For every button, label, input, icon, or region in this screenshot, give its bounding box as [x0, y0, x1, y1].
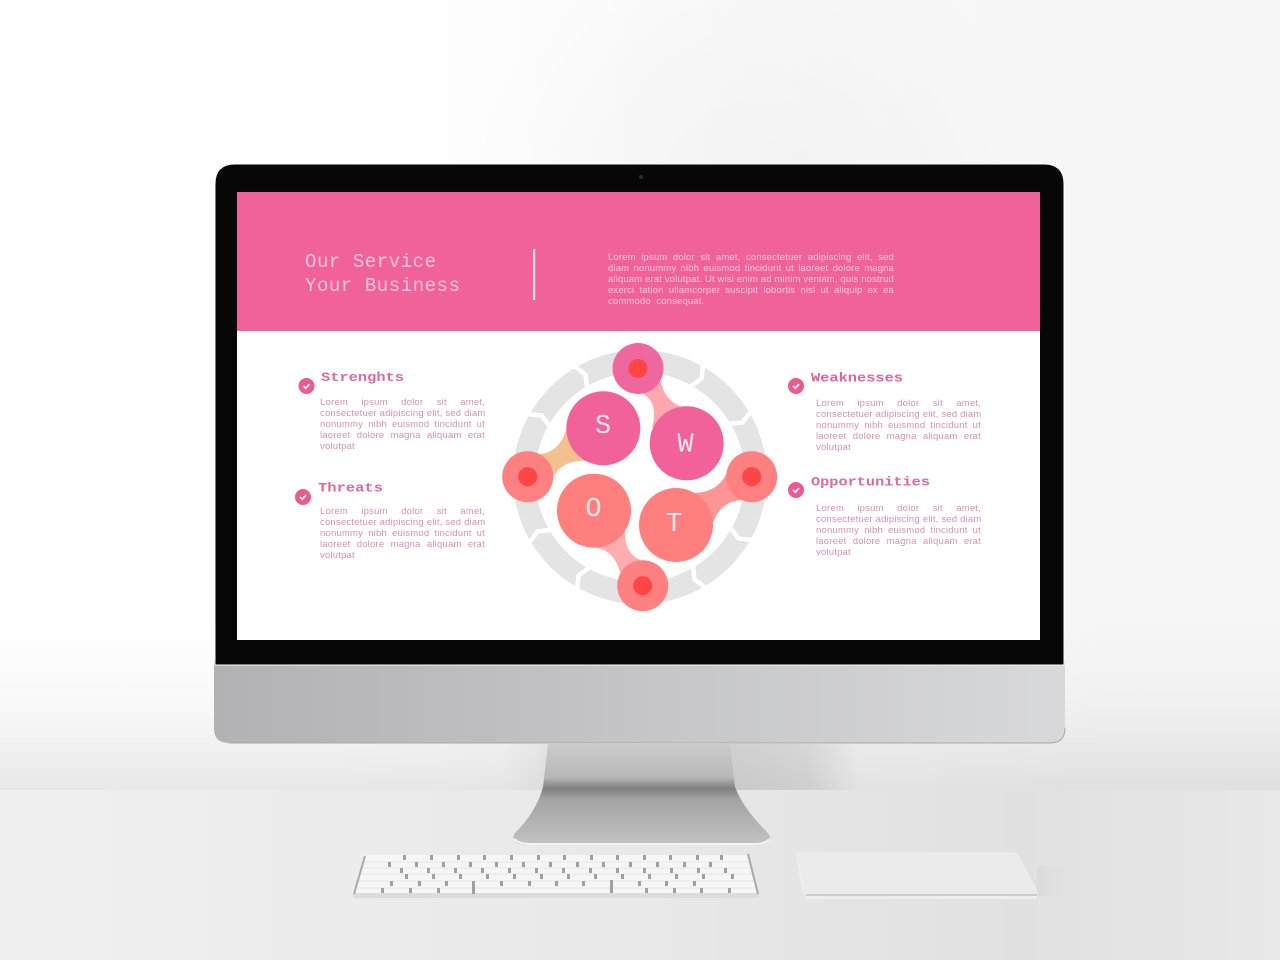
text: Strenghts: laoreet dolore magna aliquam erat — [320, 430, 485, 441]
header paragraph: exerci tation ullamcorper suscipit lobortis nisl ut aliquip ex ea — [608, 285, 894, 296]
segmented ring — [510, 361, 770, 607]
text: Strenghts: consectetuer adipiscing elit, sed diam — [320, 408, 486, 419]
trackpad — [797, 853, 1065, 899]
screen — [237, 192, 1040, 640]
text: Strenghts: Lorem ipsum dolor sit amet, — [320, 397, 485, 408]
circle S: S — [595, 412, 611, 442]
check icon: Strenghts — [298, 378, 314, 394]
title: Your Business — [305, 275, 460, 297]
text: Threats: volutpat — [320, 550, 355, 561]
text: Opportunities: laoreet dolore magna aliquam erat — [816, 536, 981, 547]
heading: Strenghts: Strenghts — [321, 370, 404, 385]
check icon: Opportunities — [788, 482, 804, 498]
connector: S — [540, 426, 589, 481]
header band — [237, 192, 1040, 331]
connector: O — [594, 531, 644, 579]
SWOT diagram — [502, 343, 777, 611]
circle W — [650, 406, 724, 480]
circle T: T — [666, 510, 682, 540]
circle W: W — [677, 430, 694, 460]
monitor — [214, 164, 1065, 743]
webcam — [639, 175, 643, 179]
circle S — [566, 391, 640, 465]
monitor chin — [214, 660, 1065, 743]
text: Strenghts: nonummy nibh euismod tincidunt ut — [320, 419, 485, 430]
text: Threats: nonummy nibh euismod tincidunt ut — [320, 528, 485, 539]
pin: top — [612, 343, 664, 394]
text: Threats: consectetuer adipiscing elit, sed diam — [320, 517, 486, 528]
text: Opportunities: volutpat — [816, 547, 851, 558]
header paragraph: Lorem ipsum dolor sit amet, consectetuer adipiscing elit, sed — [608, 252, 894, 263]
header divider — [533, 249, 535, 300]
check icon: Weaknesses — [788, 378, 804, 394]
connector: T — [692, 471, 746, 526]
heading: Weaknesses: Weaknesses — [811, 370, 903, 386]
circle O — [557, 474, 631, 548]
header paragraph: commodo consequat. — [608, 296, 704, 307]
title: Our Service — [305, 251, 436, 273]
desk surface — [0, 790, 1280, 960]
text: Weaknesses: consectetuer adipiscing elit, sed diam — [816, 409, 982, 420]
header paragraph — [608, 252, 894, 307]
title — [305, 251, 460, 297]
text: Opportunities: nonummy nibh euismod tincidunt ut — [816, 525, 981, 536]
text: Weaknesses: volutpat — [816, 442, 851, 453]
text: Strenghts — [320, 397, 486, 452]
heading: Threats: Threats — [318, 480, 383, 496]
monitor stand — [513, 744, 770, 845]
header paragraph: diam nonummy nibh euismod tincidunt ut laoreet dolore magna — [608, 263, 894, 274]
text: Weaknesses: laoreet dolore magna aliquam erat — [816, 431, 981, 442]
text: Threats: Lorem ipsum dolor sit amet, — [320, 506, 485, 517]
text: Strenghts: volutpat — [320, 441, 355, 452]
text: Opportunities: consectetuer adipiscing elit, sed diam — [816, 514, 982, 525]
pin: right — [726, 451, 777, 502]
text: Threats — [320, 506, 486, 561]
text: Opportunities: Lorem ipsum dolor sit amet, — [816, 503, 981, 514]
monitor bezel — [215, 164, 1064, 665]
text: Weaknesses — [816, 398, 982, 453]
connector: W — [636, 376, 684, 428]
check icon: Threats — [295, 489, 311, 505]
keyboard — [353, 854, 759, 898]
text: Weaknesses: nonummy nibh euismod tincidunt ut — [816, 420, 981, 431]
circle O: O — [585, 495, 602, 525]
text: Weaknesses: Lorem ipsum dolor sit amet, — [816, 398, 981, 409]
text: Opportunities — [816, 503, 982, 558]
header paragraph: aliquam erat volutpat. Ut wisi enim ad minim veniam, quis nostrud — [608, 274, 894, 285]
pin: bottom — [617, 560, 668, 611]
pin: left — [502, 451, 553, 502]
text: Threats: laoreet dolore magna aliquam erat — [320, 539, 485, 550]
heading: Opportunities: Opportunities — [811, 474, 930, 490]
circle T — [639, 488, 713, 562]
